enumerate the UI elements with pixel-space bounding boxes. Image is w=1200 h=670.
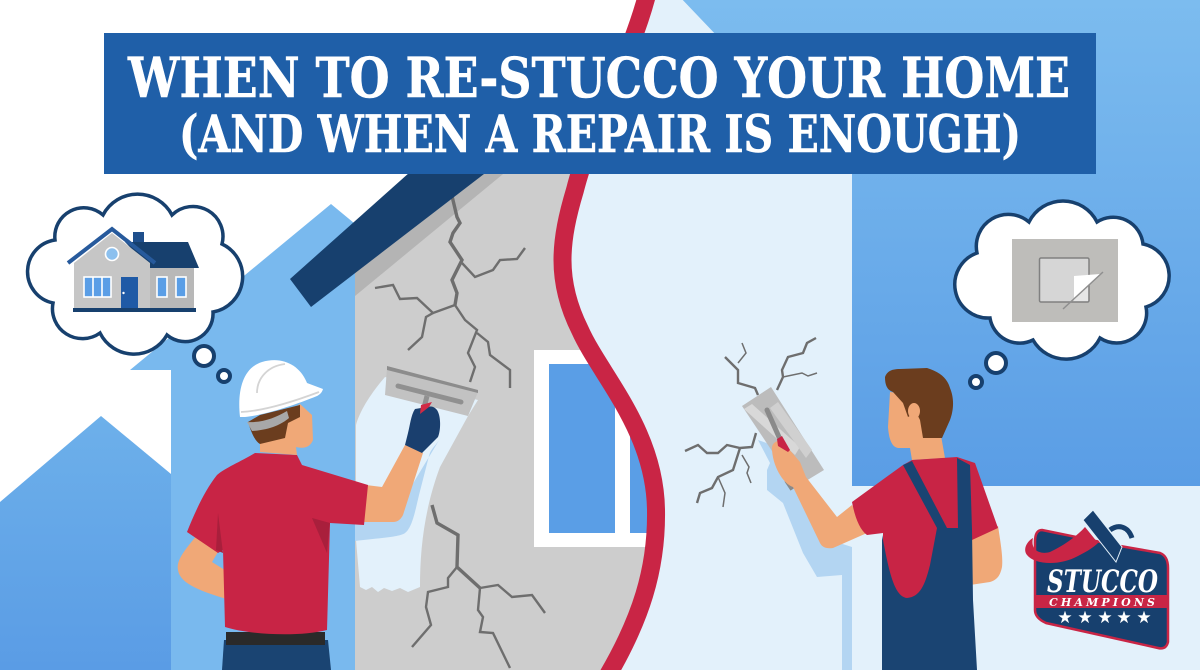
rear arm xyxy=(178,535,228,599)
small bubbles xyxy=(970,353,1006,388)
logo: Stucco Champions xyxy=(1025,510,1168,648)
background: light blue house silhouette xyxy=(130,204,360,670)
cracks lower left wall xyxy=(412,505,545,668)
helmet xyxy=(239,360,323,417)
ear xyxy=(908,403,920,419)
background: dark blue house silhouette xyxy=(0,416,171,670)
shirt xyxy=(852,457,998,600)
logo trowel xyxy=(1083,510,1132,562)
divider: red curved line xyxy=(562,0,656,670)
small bubbles xyxy=(194,346,230,382)
left worker re-stuccoing xyxy=(178,360,478,670)
title banner xyxy=(104,33,1096,174)
thought bubble left: whole house xyxy=(28,194,243,382)
shirt folds xyxy=(216,513,330,553)
logo wordmark: STUCCO xyxy=(1047,564,1158,600)
glove xyxy=(405,406,440,453)
fresh plaster patch xyxy=(356,377,478,592)
background: blue right block xyxy=(678,0,1200,486)
right worker patching xyxy=(742,368,1002,670)
logo stars: ★ xyxy=(1097,608,1113,628)
cloud xyxy=(28,194,243,354)
trowel handle xyxy=(420,402,432,414)
logo stars: ★ xyxy=(1057,608,1073,628)
icon: house xyxy=(68,229,199,312)
overalls with straps xyxy=(882,458,977,670)
pants and belt xyxy=(222,632,331,670)
helmet strap xyxy=(247,411,289,431)
handle in hand xyxy=(777,436,790,452)
trowel xyxy=(385,366,478,416)
window xyxy=(534,350,647,547)
logo stars: ★ xyxy=(1136,608,1152,628)
neck and face xyxy=(888,392,945,460)
icon: wall patch xyxy=(1012,239,1118,322)
logo stars: ★ xyxy=(1077,608,1093,628)
red band xyxy=(1036,595,1167,608)
panel: repaired pale wall xyxy=(562,0,1200,670)
thought bubble right: small patch xyxy=(955,201,1169,388)
neck and face xyxy=(260,404,313,455)
front arm and hand xyxy=(772,441,867,548)
swoosh xyxy=(1025,527,1098,563)
patch trowel xyxy=(742,387,824,489)
roof beam xyxy=(290,164,497,307)
rear arm xyxy=(970,526,1002,585)
arm shadow on plaster xyxy=(355,437,441,541)
cracks upper left wall xyxy=(375,196,525,388)
right worker shadow on wall xyxy=(758,440,852,670)
hair xyxy=(248,405,300,444)
badge xyxy=(1035,530,1168,648)
title line 2: (AND WHEN A REPAIR IS ENOUGH) xyxy=(179,105,1021,165)
raised arm xyxy=(364,445,423,522)
hair xyxy=(885,368,953,438)
logo subtitle: CHAMPIONS xyxy=(1049,596,1155,609)
cloud xyxy=(955,201,1169,359)
shirt xyxy=(187,453,368,634)
logo stars: ★ xyxy=(1116,608,1132,628)
panel: grey stucco wall xyxy=(355,160,665,670)
logo stars xyxy=(1057,608,1152,628)
cracks on repaired wall xyxy=(685,338,817,507)
